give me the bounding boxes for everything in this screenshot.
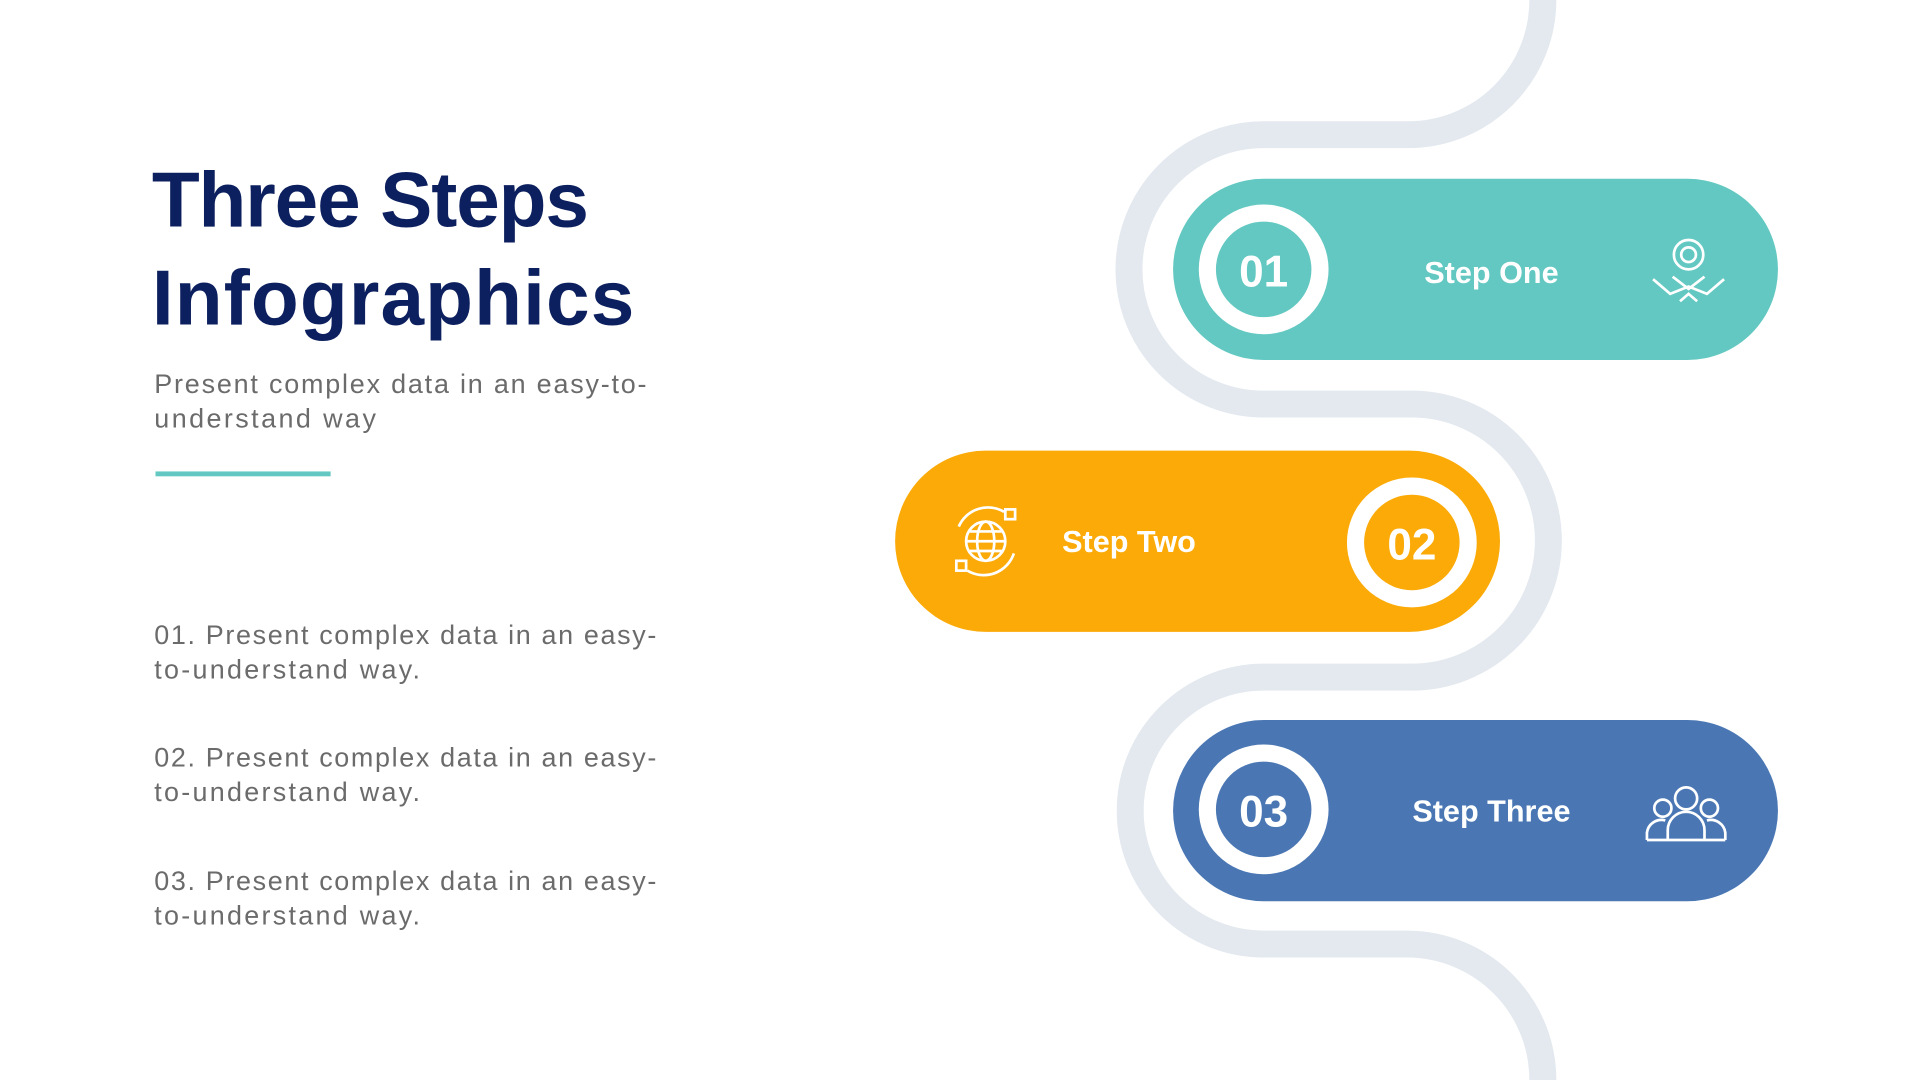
list of step descriptions: 02. Present complex data in an easy-	[154, 743, 656, 773]
panel: step two	[895, 451, 1500, 632]
accent line	[156, 471, 331, 476]
list of step descriptions: 01. Present complex data in an easy-	[154, 620, 656, 650]
icon: globe	[956, 507, 1015, 575]
panel: step one	[1173, 179, 1778, 360]
connector path	[1129, 0, 1548, 1080]
subtitle: Present complex data in an easy-to-	[154, 369, 647, 399]
panel: step three: Step Three	[1412, 795, 1571, 829]
list of step descriptions: 03. Present complex data in an easy-	[154, 866, 656, 896]
subtitle: understand way	[154, 403, 376, 433]
panel: step one: Step One	[1424, 256, 1559, 290]
list of step descriptions: to-understand way.	[154, 777, 420, 807]
title: Infographics	[152, 253, 634, 341]
title: Three Steps	[152, 156, 589, 244]
title	[152, 156, 634, 341]
icon: team	[1647, 787, 1725, 840]
panel: step three	[1173, 720, 1778, 901]
subtitle	[154, 369, 647, 433]
panel: step one: 01	[1239, 248, 1288, 297]
icon: handshake gear	[1653, 240, 1724, 301]
list of step descriptions: to-understand way.	[154, 654, 420, 684]
panel: step two: 02	[1387, 521, 1436, 570]
list of step descriptions: to-understand way.	[154, 900, 420, 930]
panel: step three: 03	[1239, 788, 1288, 837]
list of step descriptions	[154, 620, 656, 930]
panel: step two: Step Two	[1062, 525, 1196, 559]
